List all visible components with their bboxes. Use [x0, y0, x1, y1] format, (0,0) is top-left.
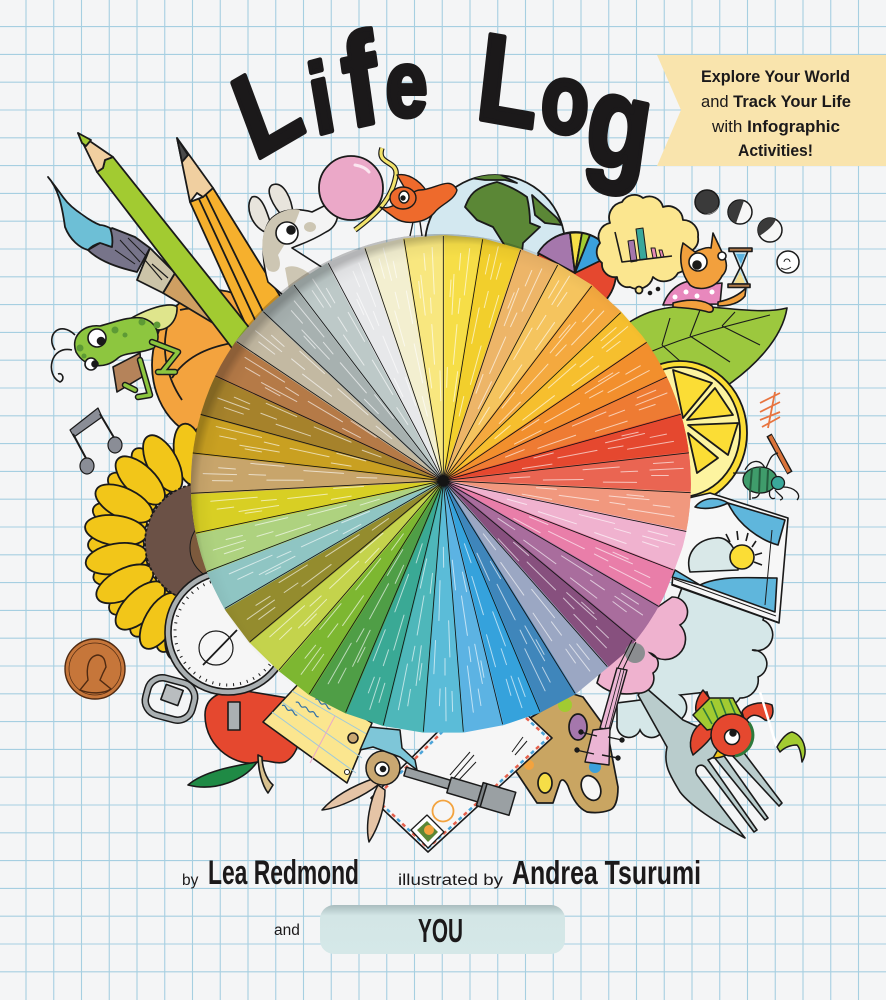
- text: illustrator credit: Andrea Tsurumi: [512, 854, 701, 891]
- banner: tagline ribbon: Explore Your World: [701, 67, 850, 86]
- title: Life Log: g: [579, 44, 661, 201]
- icon: cat with hourglass: [663, 233, 752, 312]
- icon: apple: [188, 690, 302, 793]
- icon: grasshopper: [51, 305, 178, 397]
- icon: pumpkin: [152, 290, 278, 440]
- panel: YOU name plate: YOU: [418, 912, 463, 949]
- icon: yellow pencil: [177, 138, 295, 345]
- icon: fork: [638, 687, 782, 838]
- title: Life Log: o: [538, 42, 593, 156]
- title: Life Log: f: [333, 4, 388, 155]
- icon: green pencil: [78, 133, 255, 352]
- icon: pie chart: [534, 232, 616, 314]
- icon: lemon slice: [613, 361, 747, 505]
- icon: lined note paper: [263, 680, 372, 783]
- icon: green beetle: [733, 453, 799, 500]
- icon: pale blue cloud: [617, 563, 773, 738]
- icon: pink cloud: [597, 597, 688, 694]
- icon: bubble gum: [319, 156, 383, 220]
- text: author credit: by: [182, 872, 199, 889]
- icon: tally marks and pencil: [760, 392, 790, 473]
- icon: globe: [424, 174, 565, 256]
- banner: tagline ribbon: and Track Your Life: [701, 92, 851, 111]
- icon: leaf: [628, 306, 787, 385]
- text: author credit: Lea Redmond: [208, 854, 359, 892]
- text: and: and: [274, 922, 300, 939]
- icon: orange bird with measuring tape: [355, 148, 457, 236]
- panel: YOU name plate: [320, 905, 565, 954]
- icon: penny: [65, 639, 125, 699]
- title: Life Log: L: [471, 6, 547, 155]
- icon: music notes: [70, 408, 122, 474]
- text: author credit: [182, 854, 359, 892]
- text: illustrator credit: [398, 854, 701, 891]
- title: Life Log: e: [386, 32, 427, 137]
- title: Life Log: i: [301, 42, 341, 157]
- text: illustrator credit: illustrated by: [398, 872, 503, 889]
- icon: paint brush: [48, 177, 250, 340]
- icon: bunny: [322, 727, 417, 842]
- icon: thought bubble with bar chart: [597, 195, 698, 294]
- icon: violin: [575, 640, 645, 765]
- icon: airmail envelope: [371, 680, 552, 852]
- banner: tagline ribbon: with Infographic: [711, 117, 840, 136]
- title: Life Log: [218, 4, 661, 201]
- icon: red bird on fork: [690, 690, 805, 762]
- icon: sunflower: [83, 421, 265, 664]
- chart: colour wheel: [190, 234, 692, 734]
- icon: artist palette: [515, 693, 618, 813]
- title: Life Log: L: [218, 33, 317, 185]
- banner: tagline ribbon: Activities!: [738, 141, 813, 160]
- banner: tagline ribbon: [657, 55, 886, 166]
- icon: moon phases: [695, 190, 799, 273]
- icon: telescope: [402, 760, 516, 815]
- icon: llama: [249, 184, 345, 310]
- icon: stopwatch: [142, 569, 291, 730]
- icon: window picture: [672, 493, 788, 623]
